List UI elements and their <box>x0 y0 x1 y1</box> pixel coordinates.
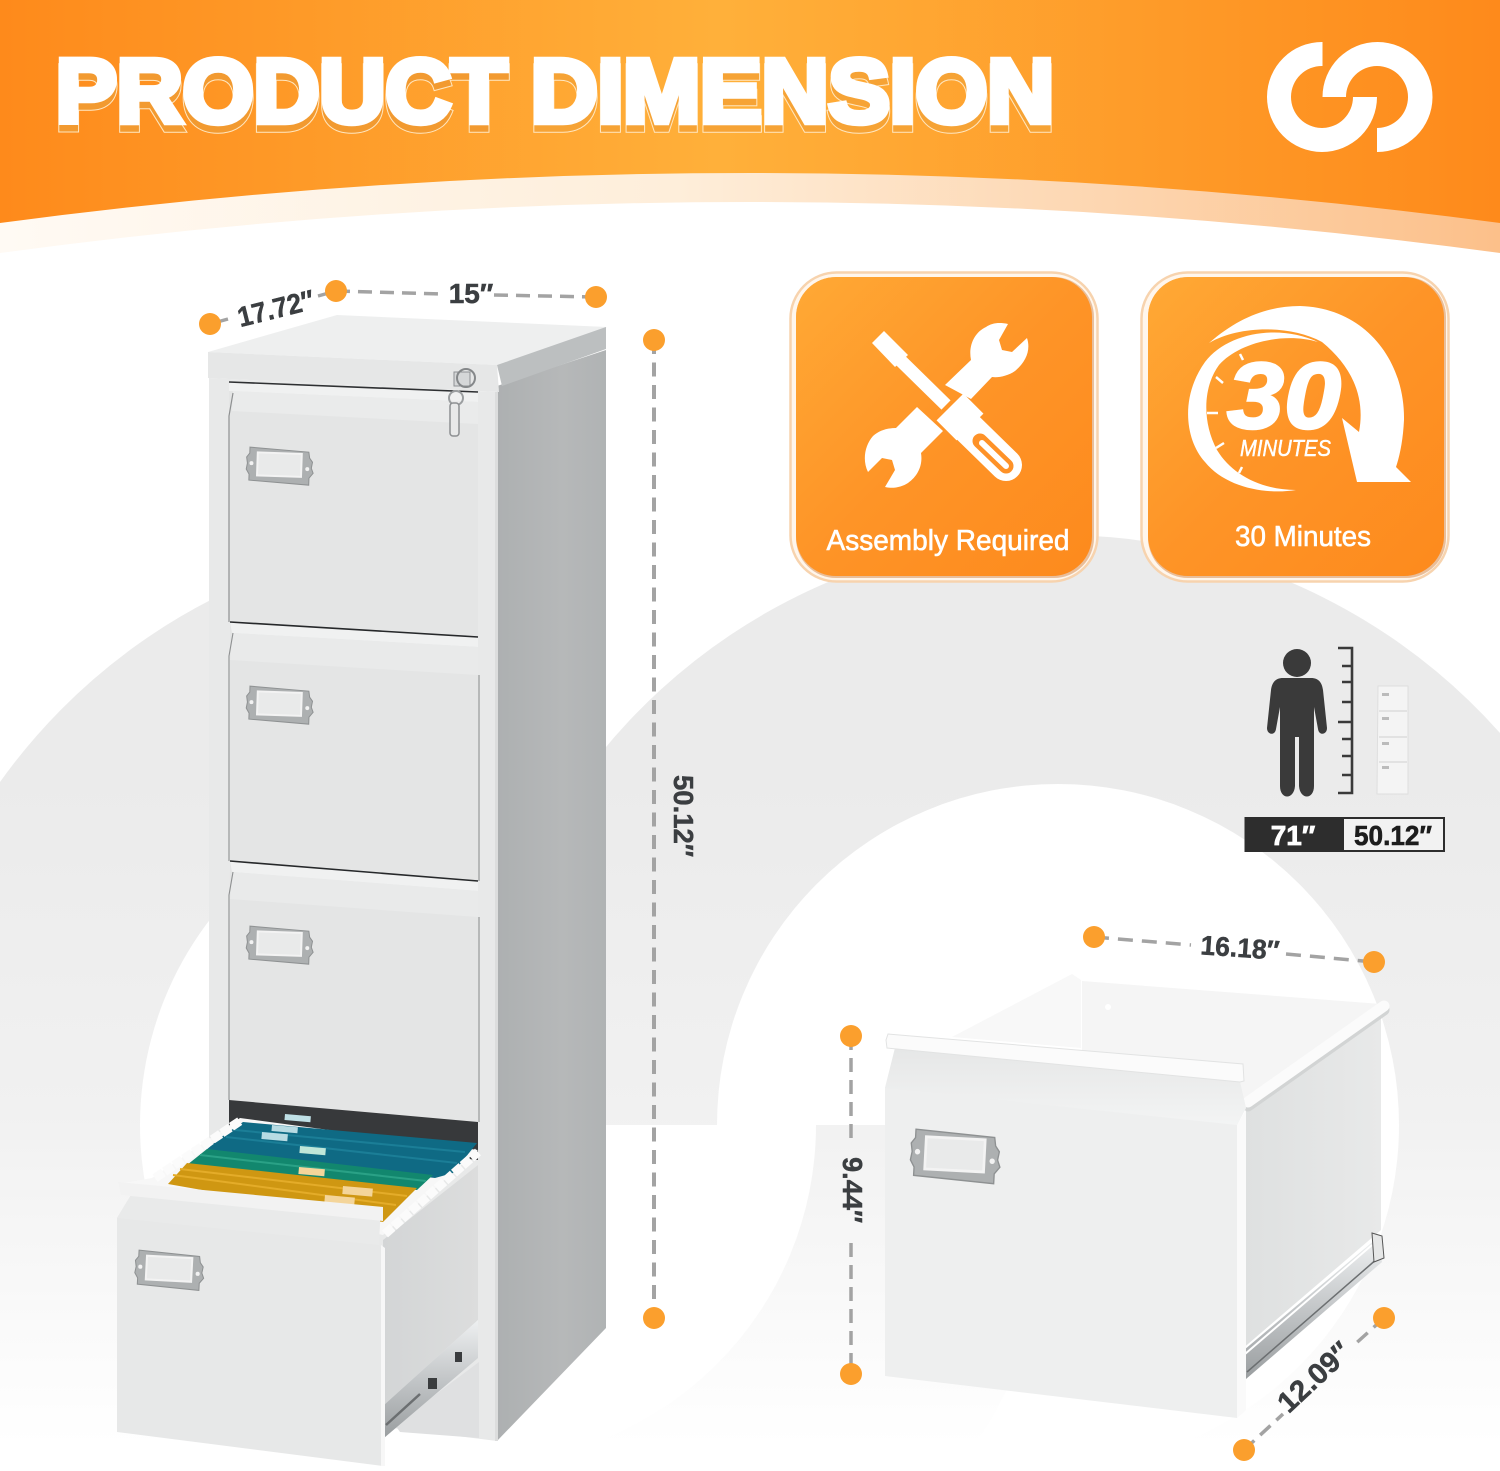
open drawer front <box>117 1182 385 1466</box>
title: DIMENSION <box>531 49 1054 149</box>
title: PRODUCT <box>56 42 507 142</box>
dimension: 16.18 inch drawer width: 16.18″ <box>1200 930 1281 966</box>
dimension: 15 inch width <box>325 278 607 309</box>
panel: 30 minutes <box>1142 272 1448 582</box>
hanging files <box>168 1114 477 1222</box>
removed drawer <box>885 974 1384 1418</box>
drawer 1 <box>229 382 478 637</box>
title: DIMENSION <box>531 42 1054 142</box>
label: assembly required: Assembly Required <box>826 525 1070 557</box>
title: PRODUCT <box>56 49 507 149</box>
drawer rim <box>1248 1006 1384 1106</box>
lock and key <box>449 369 475 436</box>
dimension: 12.09 inch drawer depth <box>1233 1307 1395 1461</box>
dimension: 15 inch width: 15″ <box>449 278 493 309</box>
brand logo <box>1267 42 1432 152</box>
cabinet front frame <box>209 378 498 1441</box>
height comparison table: 50.12″ <box>1354 820 1432 851</box>
icon: 30 minute timer with arrow: 30 <box>1227 343 1341 448</box>
drawer slide rail <box>384 1320 478 1438</box>
icon: person <box>1267 649 1327 796</box>
dimension: 17.72 inch depth <box>199 284 336 335</box>
filing cabinet <box>117 315 607 1466</box>
drawer back wall <box>1082 981 1381 1100</box>
panel: assembly required <box>790 272 1098 582</box>
height comparison table: 71″ <box>1271 820 1315 851</box>
label: 30 minutes: 30 Minutes <box>1235 521 1371 553</box>
dimension: 50.12 inch height <box>643 329 699 1329</box>
open drawer with hanging files <box>117 1100 479 1466</box>
header banner <box>0 0 1500 300</box>
title <box>56 42 1054 149</box>
dimension: 12.09 inch drawer depth: 12.09″ <box>1272 1336 1358 1419</box>
height ruler <box>1338 648 1352 793</box>
mini cabinet <box>1377 686 1408 794</box>
drawer side wall <box>1241 1018 1381 1350</box>
cabinet top <box>208 315 607 392</box>
label holder <box>909 1129 1002 1184</box>
dimension: 16.18 inch drawer width <box>1083 926 1385 973</box>
icon: 30 minute timer with arrow <box>1188 306 1411 491</box>
icon: crossed wrench and screwdriver <box>865 323 1028 488</box>
height comparison table <box>1245 817 1444 851</box>
drawer 3 <box>229 861 479 1122</box>
cabinet side panel <box>497 350 606 1441</box>
dimension: 17.72 inch depth: 17.72″ <box>234 284 317 333</box>
size comparison: person vs cabinet <box>1245 648 1444 851</box>
icon: 30 minute timer with arrow: MINUTES <box>1240 435 1332 461</box>
dimension: 9.44 inch drawer height <box>837 1025 868 1385</box>
title: PRODUCT <box>56 49 507 149</box>
drawer slide rail <box>1244 1233 1384 1379</box>
drawer 2 <box>229 622 479 881</box>
title: DIMENSION <box>531 49 1054 149</box>
dimension: 50.12 inch height: 50.12″ <box>668 775 699 857</box>
drawer front panel <box>885 1034 1246 1418</box>
dimension: 9.44 inch drawer height: 9.44″ <box>837 1157 868 1223</box>
drawer inner left wall <box>952 974 1081 1048</box>
